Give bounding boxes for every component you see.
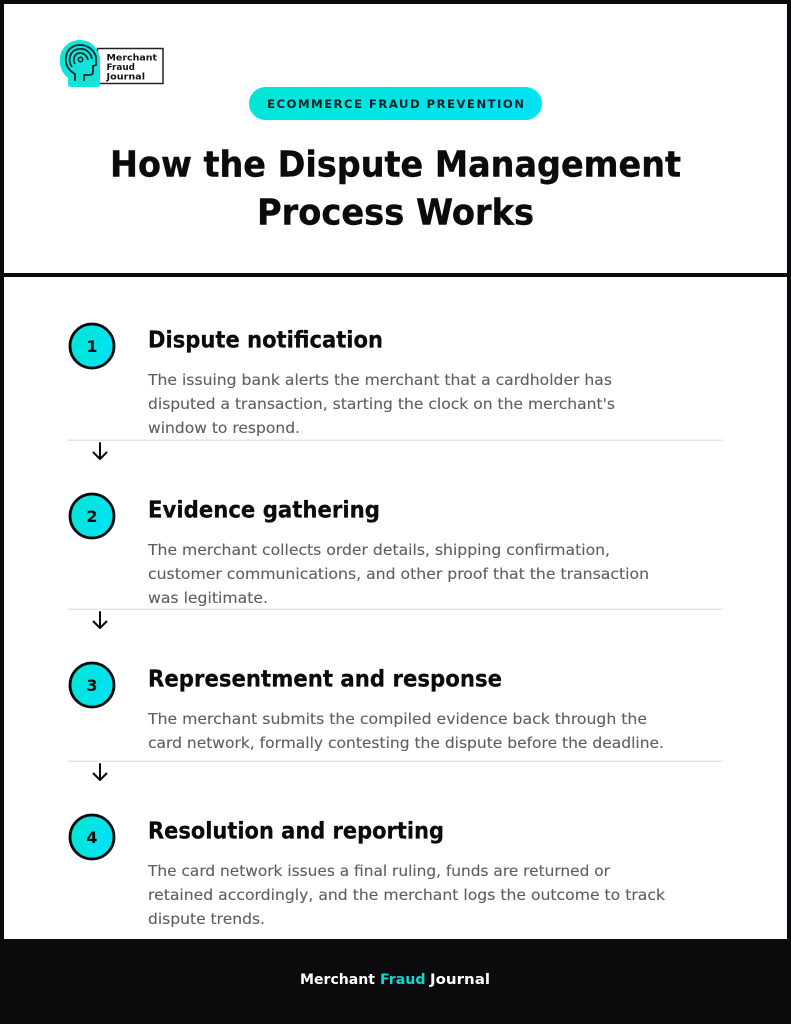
step 1 number: 1 [86,337,98,356]
step 4 description: The card network issues a final ruling, funds are returned or [147,863,611,880]
step 3 description [147,711,664,752]
category badge [249,87,542,120]
step 2 description: The merchant collects order details, shipping confirmation, [147,542,610,559]
footer band [0,939,791,1024]
step 2 heading: Evidence gathering [148,496,380,524]
logo: Merchant Fraud Journal: Merchant [106,54,157,64]
step 1 description: window to respond. [148,420,300,437]
arrow: step 3 to step 4 [94,764,106,780]
step 3 description: card network, formally contesting the dispute before the deadline. [148,735,664,752]
logo: Merchant Fraud Journal [60,40,163,87]
step 4 number [70,815,114,859]
step 3 heading: Representment and response [148,664,502,692]
step 2: Evidence gathering [70,494,649,607]
step 4 description: dispute trends. [148,911,265,928]
step 4 heading: Resolution and reporting [148,816,444,844]
step 4: Resolution and reporting [70,815,665,928]
title [110,144,681,234]
step 1 description: The issuing bank alerts the merchant that a cardholder has [147,372,612,389]
step 1 description [147,372,615,437]
step 2 description: was legitimate. [148,590,268,607]
title: How the Dispute Management [110,144,681,186]
logo: Merchant Fraud Journal: Journal [105,72,145,82]
logo: Merchant Fraud Journal: Fraud [106,63,135,73]
footer band: Journal [429,972,490,988]
step 4 description [147,863,665,928]
step 2 number [70,494,114,538]
step 3 number [70,663,114,707]
step 3 number: 3 [86,676,98,695]
title: Process Works [257,192,534,234]
footer band: Merchant [300,972,375,988]
step 3: Representment and response [70,663,664,752]
footer band: Fraud [380,972,426,988]
step 3 description: The merchant submits the compiled evidence back through the [147,711,647,728]
step 2 description [147,542,649,607]
arrow: step 2 to step 3 [94,612,106,628]
step 1 number [70,324,114,368]
step 2 number: 2 [86,507,98,526]
step 1 heading: Dispute notification [148,326,383,354]
arrow: step 1 to step 2 [94,443,106,459]
step 1 description: disputed a transaction, starting the clock on the merchant's [148,396,615,413]
step 2 description: customer communications, and other proof that the transaction [148,566,649,583]
step 4 number: 4 [86,828,98,847]
step 1: Dispute notification [70,324,615,437]
category badge: ECOMMERCE FRAUD PREVENTION [267,97,524,111]
step 4 description: retained accordingly, and the merchant logs the outcome to track [148,887,665,904]
